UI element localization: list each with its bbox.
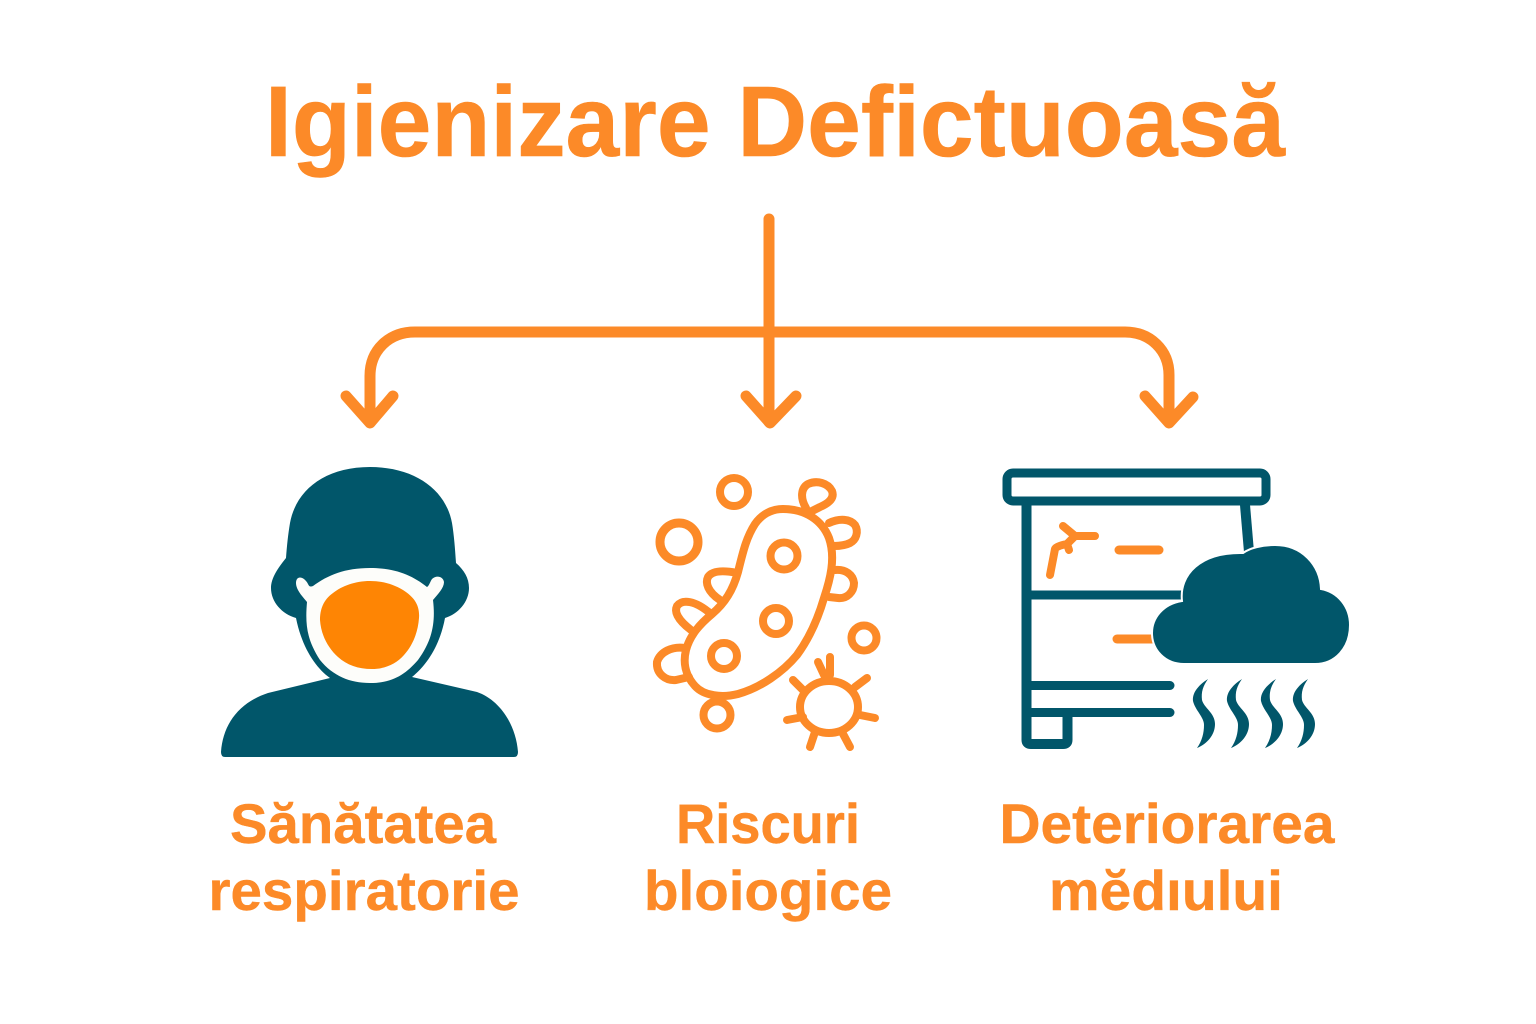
label: biological risks: Riscuri [676, 792, 860, 855]
orange marks and crack [1050, 526, 1159, 639]
label: respiratory health [208, 792, 520, 922]
label: biological risks [644, 792, 892, 922]
title: Igienizare Defictuoasă [265, 66, 1286, 178]
free spores [720, 478, 748, 506]
bumps [802, 482, 833, 512]
vapour waves [1193, 679, 1315, 748]
virus [800, 681, 858, 733]
label: environmental damage [1000, 792, 1335, 922]
arrow connector tree [346, 219, 1193, 423]
hive frame [1007, 473, 1266, 501]
bacterium body [685, 509, 832, 696]
icon: person with mask [221, 467, 518, 757]
label: respiratory health: Sănătatea [230, 792, 497, 855]
cloud [1152, 545, 1350, 664]
label: environmental damage: mĕdıului [1049, 859, 1283, 922]
label: biological risks: bloiogice [644, 859, 892, 922]
inner dots [770, 542, 798, 570]
icon: damaged hive with cloud [1007, 473, 1350, 748]
white mask outline [296, 568, 444, 683]
label: environmental damage: Deteriorarea [1000, 792, 1335, 855]
head and shoulders silhouette [221, 467, 518, 757]
label: respiratory health: respiratorie [208, 859, 520, 922]
orange mask [320, 581, 419, 669]
icon: bacteria and germs [657, 478, 876, 747]
